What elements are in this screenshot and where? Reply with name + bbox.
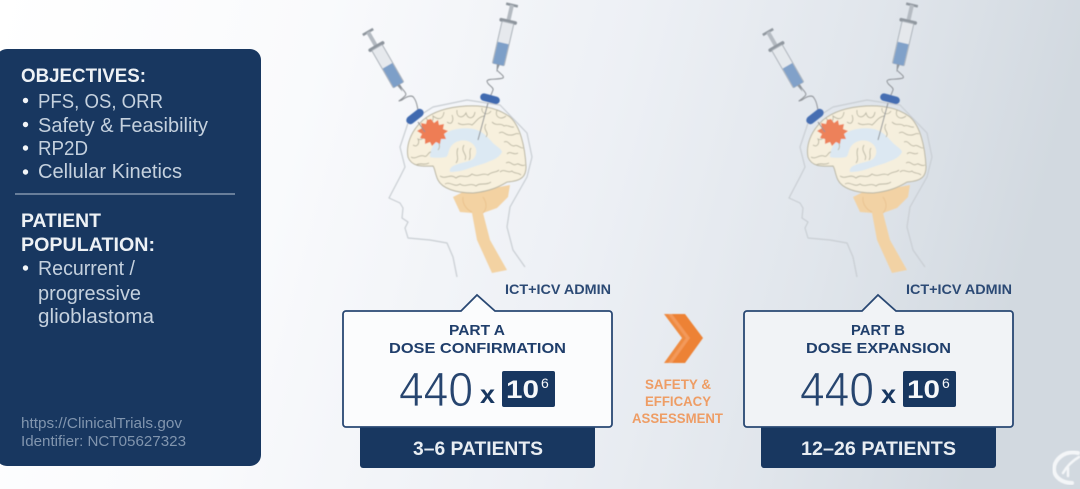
list: patient population: progressive: [38, 283, 141, 305]
patients count: 3–6 PATIENTS: [413, 439, 543, 460]
list: patient population: glioblastoma: [38, 306, 155, 328]
panel: objectives and patient population: [0, 49, 261, 466]
label: Part B administration: ICT+ICV ADMIN: [906, 282, 1012, 297]
panel: Part B: DOSE EXPANSION: [806, 340, 951, 357]
heading: PART A: [449, 322, 505, 339]
list: objectives: PFS, OS, ORR: [38, 91, 163, 113]
assessment label: ASSESSMENT: [632, 411, 724, 426]
dose: [399, 364, 555, 417]
heading: PART B: [851, 322, 905, 339]
dose: 10: [907, 376, 940, 404]
assessment label: SAFETY &: [645, 377, 711, 392]
panel: Part A: [343, 282, 612, 468]
assessment label: EFFICACY: [645, 394, 711, 409]
list: objectives: Safety & Feasibility: [38, 115, 208, 137]
icon: logo: [1054, 452, 1079, 483]
source note: Identifier: NCT05627323: [21, 434, 186, 450]
heading: patient population: [21, 211, 155, 256]
heading: objectives: OBJECTIVES:: [21, 66, 146, 87]
list: objectives: Cellular Kinetics: [38, 161, 182, 183]
dose: x: [881, 381, 896, 409]
source note: https://ClinicalTrials.gov: [21, 416, 183, 432]
list: patient population: Recurrent /: [38, 258, 135, 280]
heading: patient population: PATIENT: [21, 211, 101, 232]
list: objectives: RP2D: [38, 138, 88, 160]
assessment label: [632, 377, 724, 426]
panel: Part B: [744, 282, 1013, 468]
dose: 440: [399, 364, 473, 417]
heading: patient population: POPULATION:: [21, 235, 155, 256]
arrow: safety and efficacy assessment: [632, 314, 724, 426]
dose: 6: [942, 375, 950, 391]
dose: [800, 364, 956, 417]
callout box: [744, 295, 1013, 427]
patients bar: [761, 426, 996, 468]
list: patient population: [23, 258, 155, 328]
illustration: Part A brain with syringes: [360, 3, 532, 277]
patients bar: [360, 426, 595, 468]
chevron: [664, 314, 703, 363]
panel: Part A: DOSE CONFIRMATION: [389, 340, 566, 357]
dose: x: [480, 381, 495, 409]
source note: [21, 416, 186, 450]
patients count: 12–26 PATIENTS: [801, 439, 956, 460]
dose: 10: [506, 376, 539, 404]
illustration: Part B brain with syringes: [760, 3, 932, 277]
dose: 440: [800, 364, 874, 417]
label: Part A administration: ICT+ICV ADMIN: [505, 282, 611, 297]
dose: 6: [541, 375, 549, 391]
callout box: [343, 295, 612, 427]
list: objectives: [23, 91, 208, 183]
